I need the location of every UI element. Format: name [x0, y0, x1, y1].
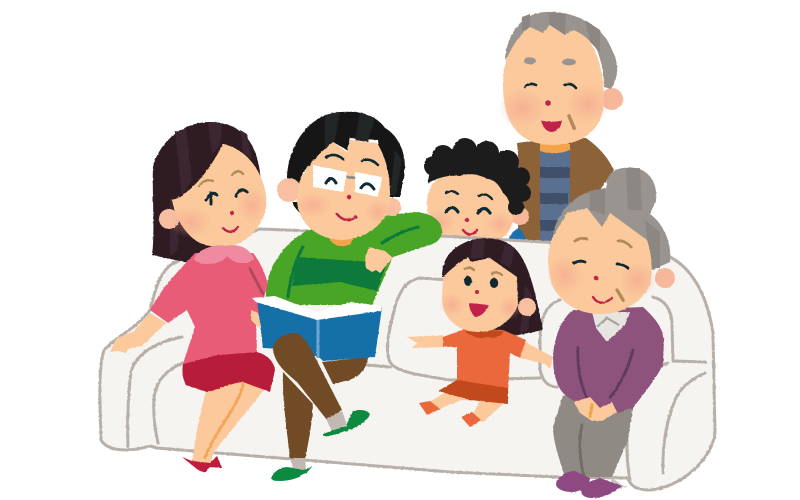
boy eyes and brows: [446, 191, 492, 213]
boy face: [427, 168, 513, 242]
sofa body: [100, 229, 715, 490]
grandmother collar: [592, 312, 630, 342]
mother face: [172, 144, 266, 247]
sofa: [100, 229, 715, 490]
girl eyes and brows: [464, 268, 502, 288]
grandmother: [547, 168, 675, 498]
boy ear: [511, 207, 529, 225]
boy: [424, 138, 531, 242]
boy nose: [465, 218, 469, 222]
father hair stripes: [325, 112, 402, 195]
grandmother leg line: [580, 425, 584, 477]
mother nose: [230, 211, 234, 215]
father crossed leg: [273, 333, 342, 420]
grandmother wrinkle: [617, 290, 623, 300]
father sock lower: [290, 458, 306, 471]
father glasses: [313, 165, 382, 197]
mother hand on book: [251, 310, 261, 328]
boy blush: [425, 210, 515, 236]
grandfather jacket: [517, 137, 614, 241]
father hand: [365, 247, 393, 273]
mother leg: [192, 381, 264, 463]
grandfather face: [503, 22, 604, 145]
father ears: [277, 178, 401, 216]
mother: [110, 122, 275, 473]
father sweater: [266, 212, 442, 305]
mother collar: [194, 245, 254, 264]
girl face: [442, 257, 518, 332]
mother blush: [168, 187, 268, 238]
grandmother collar line: [597, 318, 619, 327]
grandmother hair: [553, 168, 670, 270]
father sock upper: [326, 411, 347, 431]
father mouth: [337, 214, 356, 220]
grandmother face: [548, 208, 652, 314]
father blush: [295, 192, 391, 224]
father slipper upper: [323, 410, 370, 436]
father slipper lower: [271, 466, 312, 481]
sofa right cushion lines: [653, 297, 705, 362]
mother dress: [150, 253, 268, 364]
girl arms: [407, 335, 553, 369]
mother sleeve line: [250, 269, 263, 294]
father hair: [287, 112, 405, 218]
grandmother hands: [574, 397, 617, 421]
grandmother shoes: [556, 471, 628, 498]
mother skirt: [182, 352, 275, 392]
grandmother nose: [594, 276, 598, 280]
mother hair back: [152, 122, 262, 265]
grandmother hair stripes: [590, 168, 660, 268]
girl legs: [424, 384, 503, 422]
grandfather nose: [545, 100, 551, 106]
girl hair: [442, 238, 543, 336]
mother eyes and brows: [199, 171, 247, 204]
grandfather eyes and brows: [524, 57, 576, 88]
mother mouth: [223, 227, 238, 232]
sofa left arm lines: [128, 337, 183, 447]
grandfather blush: [498, 84, 610, 128]
mother hair stripes: [170, 122, 252, 256]
grandmother sweater lines: [578, 348, 633, 400]
sofa right arm lines: [627, 363, 705, 480]
father: [251, 112, 442, 481]
grandmother sweater: [553, 307, 664, 413]
father standing leg: [283, 372, 313, 459]
open book: [252, 296, 382, 361]
grandmother legs: [553, 395, 633, 477]
girl blush: [439, 293, 522, 320]
grandfather mouth: [541, 120, 562, 132]
mother shoes: [182, 456, 222, 473]
grandmother ring: [590, 405, 592, 416]
father back thigh: [322, 357, 368, 384]
father sweater stripe: [292, 257, 387, 291]
girl mouth: [469, 303, 489, 317]
girl nose: [475, 290, 479, 294]
grandfather hair stripes: [522, 12, 600, 52]
grandfather hair: [505, 12, 617, 89]
mother ear: [159, 209, 179, 229]
boy shirt: [508, 228, 526, 241]
girl ear: [518, 298, 536, 316]
boy hair: [424, 138, 531, 215]
girl dress: [443, 328, 526, 392]
grandfather striped shirt: [540, 144, 570, 241]
grandmother ear: [655, 268, 675, 288]
father face: [297, 140, 390, 240]
father sleeve lines: [288, 227, 418, 297]
girl skirt: [438, 380, 508, 404]
girl collar: [465, 329, 505, 338]
girl socks: [419, 401, 481, 427]
mother leg line: [205, 384, 243, 458]
grandfather ear: [601, 88, 623, 110]
girl hair stripes: [470, 238, 532, 333]
grandfather: [498, 12, 623, 241]
grandmother blush: [547, 255, 656, 298]
mother hand on sofa arm: [110, 313, 166, 353]
father nose: [347, 195, 351, 199]
father collar: [329, 238, 354, 246]
sofa middle cushion lines: [367, 278, 560, 387]
grandmother eyes and brows: [574, 238, 631, 268]
grandmother mouth: [593, 297, 612, 303]
father eyes and brows: [326, 155, 378, 189]
boy mouth: [463, 230, 477, 234]
girl: [407, 238, 553, 427]
grandfather wrinkle: [569, 116, 574, 128]
